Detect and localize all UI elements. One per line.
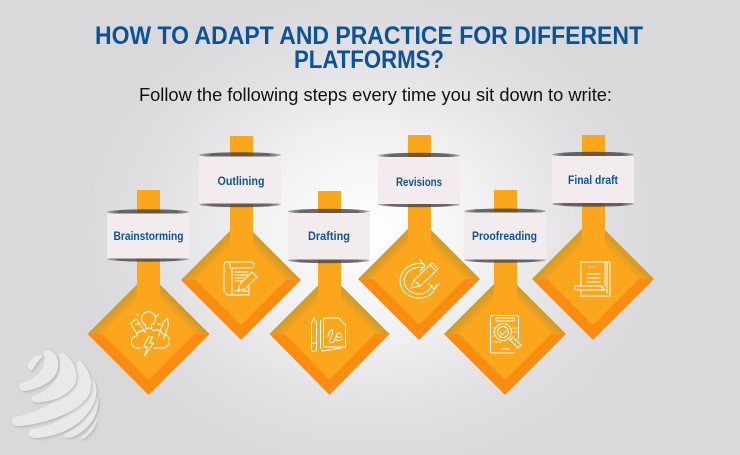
connector bar xyxy=(494,190,517,300)
title: HOW TO ADAPT AND PRACTICE FOR DIFFERENT xyxy=(95,22,643,50)
banner xyxy=(552,152,634,207)
banner: Drafting xyxy=(308,231,350,243)
icon: circular arrows and pencil xyxy=(400,260,439,298)
banner xyxy=(199,152,281,207)
icon: document with magnifier and check xyxy=(490,316,521,353)
logo: globe watermark xyxy=(12,350,98,439)
icon: cloud, bulb, ruler, pencil, lightning xyxy=(130,312,169,356)
step 1: Brainstorming xyxy=(88,190,210,395)
banner: Final draft xyxy=(568,175,618,187)
connector bar xyxy=(582,135,605,245)
diamond xyxy=(358,218,480,340)
banner: Proofreading xyxy=(472,231,537,243)
banner xyxy=(107,209,189,262)
step 5: Proofreading xyxy=(444,190,566,395)
banner: Revisions xyxy=(396,177,442,189)
subtitle: Follow the following steps every time you sit down to write: xyxy=(139,85,612,105)
banner: Brainstorming xyxy=(114,231,184,243)
icon: scroll and pen xyxy=(224,262,257,295)
banner xyxy=(464,208,546,263)
icon: pencil and handwritten sheet xyxy=(312,318,346,352)
connector bar xyxy=(318,191,341,301)
banner xyxy=(378,153,460,207)
title xyxy=(95,22,643,74)
banner xyxy=(288,209,370,263)
step 2: Outlining xyxy=(181,136,301,340)
connector bar xyxy=(408,135,431,245)
step 3: Drafting xyxy=(270,191,390,395)
diamond xyxy=(88,273,210,395)
connector bar xyxy=(230,136,253,245)
banner: Outlining xyxy=(218,176,264,188)
title: PLATFORMS? xyxy=(294,46,444,74)
diamond xyxy=(444,273,566,395)
step 6: Final draft xyxy=(532,135,654,340)
step 4: Revisions xyxy=(358,135,480,340)
icon: paper stack xyxy=(575,262,610,296)
diamond xyxy=(270,274,390,395)
diamond xyxy=(532,218,654,340)
connector bar xyxy=(137,190,160,299)
diamond xyxy=(181,220,301,340)
